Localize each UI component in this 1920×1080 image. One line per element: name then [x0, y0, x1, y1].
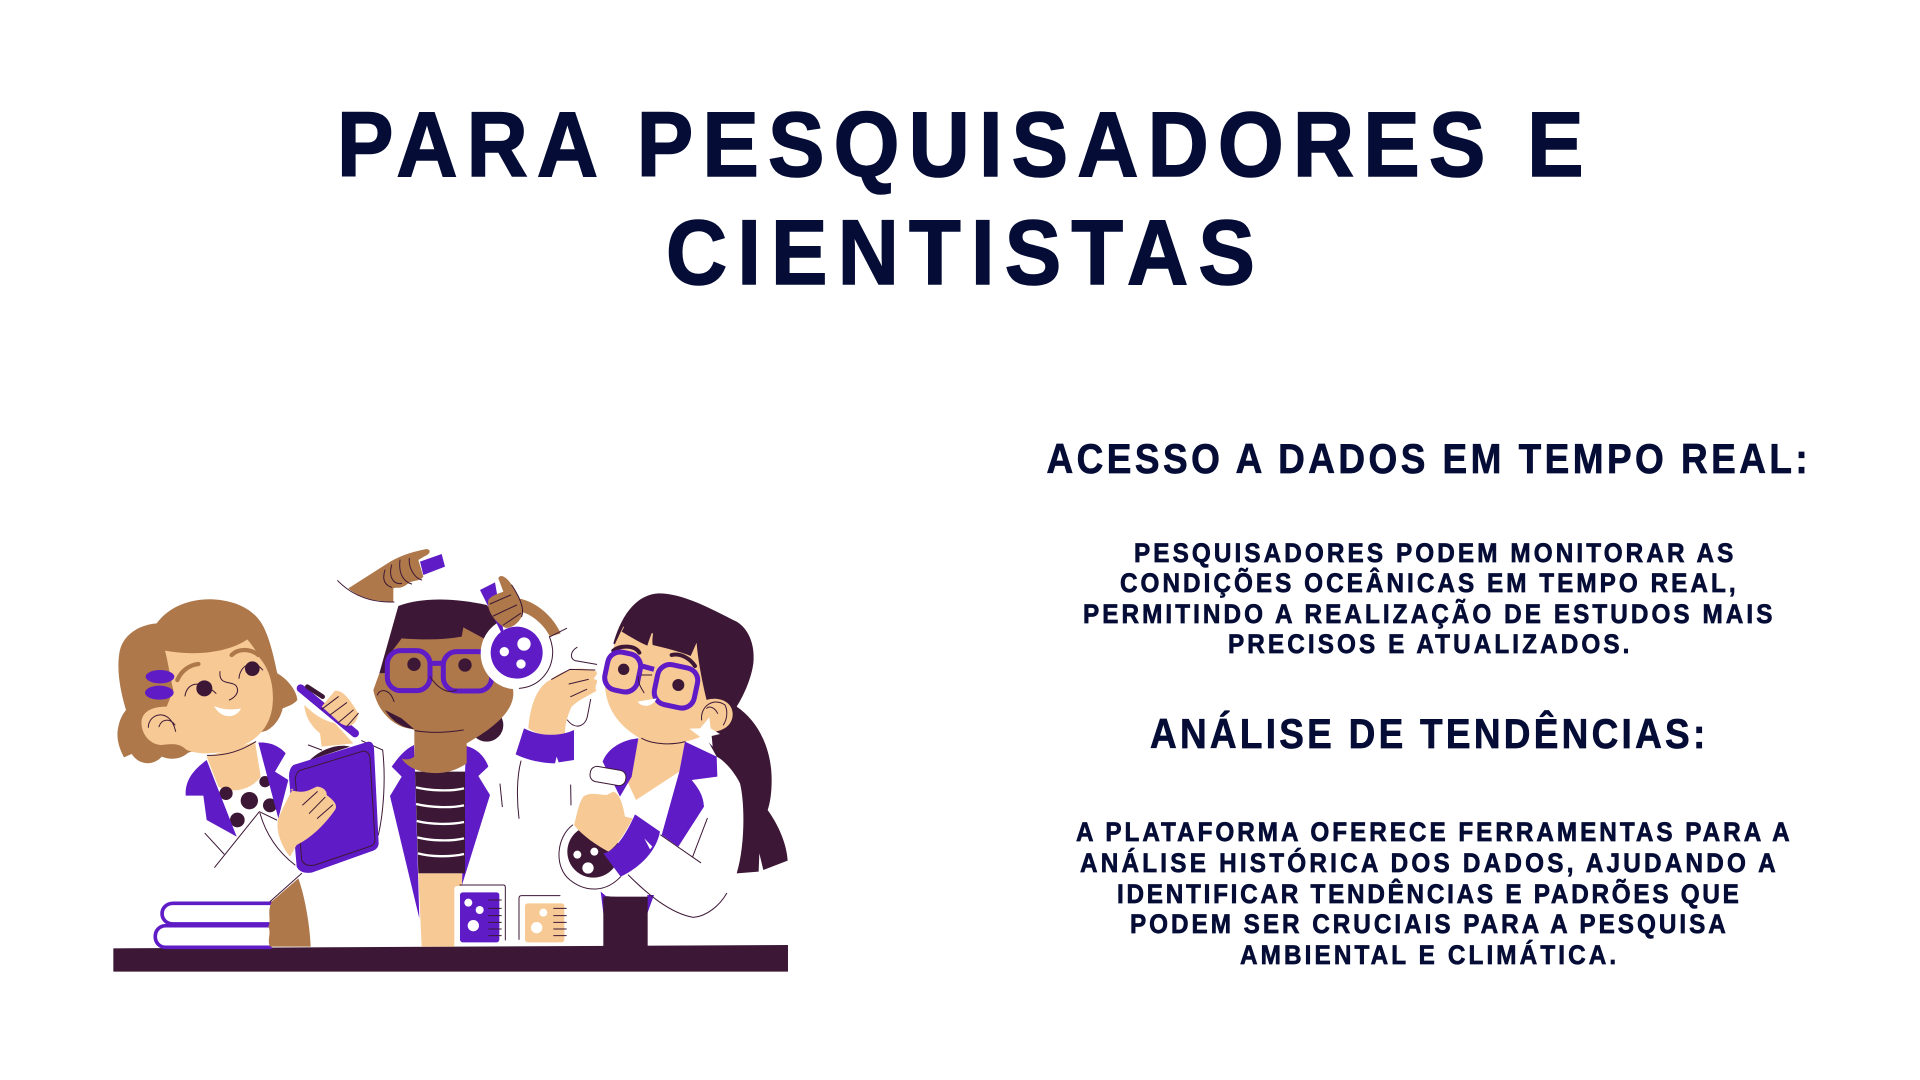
text block: analise de tendencias: A PLATAFORMA OFERECE FERRAMENTAS PARA A: [1076, 818, 1790, 847]
character: left scientist: [117, 599, 384, 947]
title: PARA PESQUISADORES E: [337, 93, 1584, 196]
text block: acesso a dados: [1083, 539, 1772, 659]
text block: analise de tendencias: IDENTIFICAR TENDÊNCIAS E PADRÕES QUE: [1117, 878, 1739, 909]
text block: acesso a dados: PERMITINDO A REALIZAÇÃO DE ESTUDOS MAIS: [1083, 598, 1772, 629]
character: right scientist: [559, 593, 788, 947]
text block: acesso a dados: PRECISOS E ATUALIZADOS.: [1228, 630, 1629, 659]
character: middle scientist: [338, 549, 597, 947]
illustration: three scientists: [113, 549, 788, 972]
icon: purple beaker: [454, 885, 505, 945]
table: [113, 945, 788, 972]
text block: analise de tendencias: ANÁLISE HISTÓRICA DOS DADOS, AJUDANDO A: [1080, 847, 1776, 878]
text block: acesso a dados: PESQUISADORES PODEM MONITORAR AS: [1134, 539, 1733, 568]
title: [337, 93, 1584, 304]
icon: sparkle earring: [689, 717, 720, 747]
heading: acesso a dados: ACESSO A DADOS EM TEMPO REAL:: [1046, 436, 1808, 483]
text block: analise de tendencias: [1076, 818, 1790, 970]
heading: analise de tendencias: ANÁLISE DE TENDÊNCIAS:: [1150, 711, 1705, 758]
text block: analise de tendencias: AMBIENTAL E CLIMÁTICA.: [1240, 940, 1616, 970]
icon: dark flask: [559, 765, 627, 889]
text block: acesso a dados: CONDIÇÕES OCEÂNICAS EM TEMPO REAL,: [1120, 567, 1736, 598]
icon: orange beaker: [519, 896, 567, 942]
icon: stack of books: [155, 903, 272, 947]
title: CIENTISTAS: [666, 201, 1255, 304]
text block: analise de tendencias: PODEM SER CRUCIAIS PARA A PESQUISA: [1130, 910, 1726, 939]
